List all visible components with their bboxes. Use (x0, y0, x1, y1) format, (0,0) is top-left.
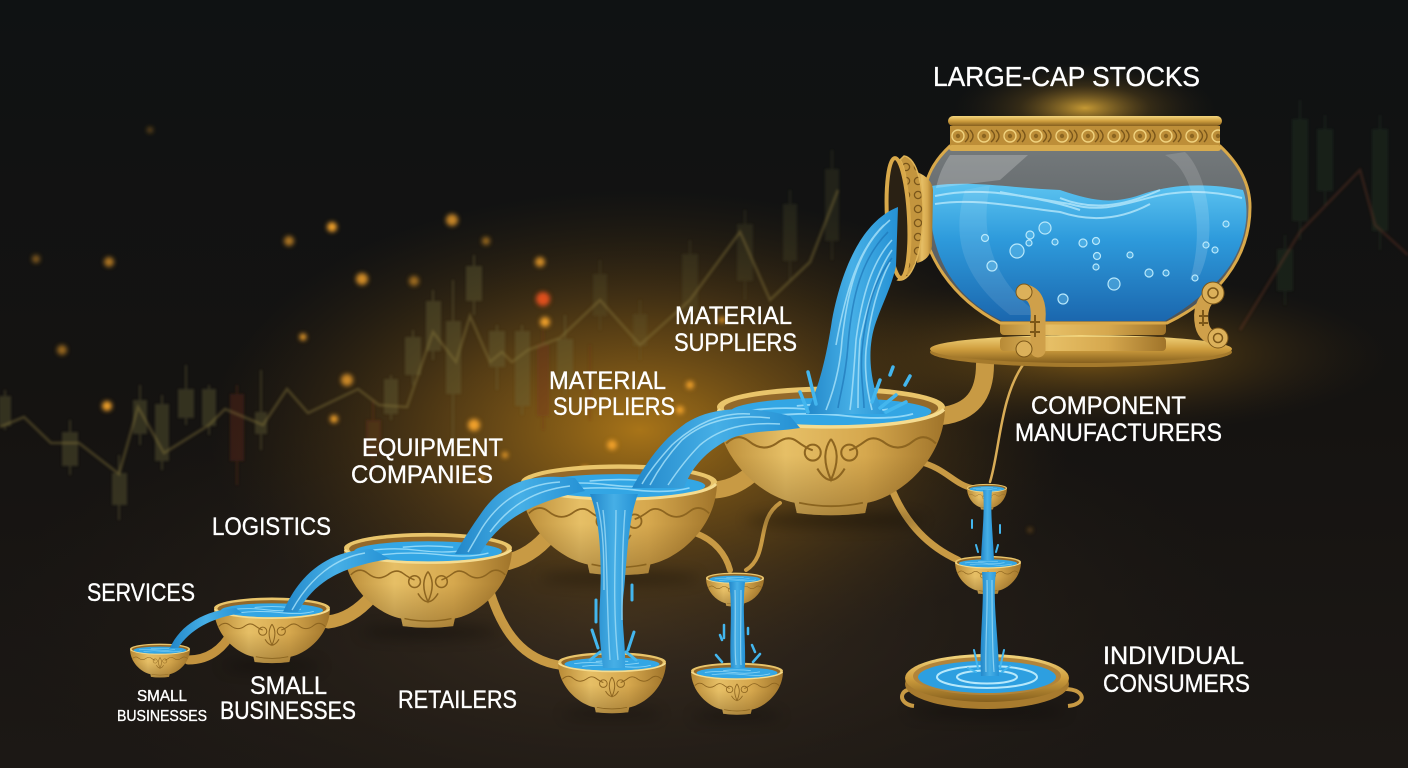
label: equipment companies: COMPANIES (351, 461, 493, 489)
waterfall: component top bowl to lower bowl (972, 490, 1000, 560)
label: material suppliers lower: MATERIAL (549, 367, 666, 395)
label: small businesses (220, 672, 356, 725)
label: material suppliers upper: MATERIAL (675, 302, 792, 330)
bowl: retailers receiving (558, 652, 666, 713)
label: material suppliers upper: SUPPLIERS (674, 329, 797, 357)
pot base rings (930, 322, 1232, 367)
label: retailers: RETAILERS (398, 686, 517, 714)
connecting golden pipes (188, 362, 1025, 666)
label: small businesses tiny (117, 688, 207, 725)
pot waves (935, 190, 1242, 218)
label: small businesses tiny: SMALL (137, 688, 187, 705)
pot water (930, 184, 1246, 321)
bowl: mid tier lower (691, 663, 783, 715)
water stream: top bowl to equipment bowl (632, 409, 800, 488)
candlestick chart backdrop (0, 100, 1408, 520)
label: individual consumers: INDIVIDUAL (1103, 642, 1244, 670)
label: logistics: LOGISTICS (212, 513, 331, 541)
water stream: pot to top bowl (800, 207, 910, 414)
waterfall: small bowl to lower bowl (716, 582, 760, 668)
spout (884, 156, 933, 280)
label: small businesses tiny: BUSINESSES (117, 708, 207, 725)
glass highlights (936, 152, 1209, 315)
label: services: SERVICES (87, 579, 195, 607)
label: material suppliers lower: SUPPLIERS (553, 393, 675, 421)
water stream: services bowl to small bowl (170, 608, 242, 648)
bowl: small businesses tiny (130, 644, 190, 678)
bowl: material suppliers (717, 386, 945, 515)
label: equipment companies: EQUIPMENT (362, 434, 503, 462)
water stream: logistics bowl to services bowl (283, 549, 390, 612)
bowl: equipment companies (521, 464, 717, 575)
bowl: logistics (344, 533, 512, 628)
bowl: component top (967, 484, 1007, 510)
waterfall: equipment bowl to retailers bowl (590, 494, 638, 668)
label: component manufacturers: MANUFACTURERS (1015, 419, 1222, 447)
pot glass body (922, 146, 1250, 323)
label: material suppliers upper (674, 302, 797, 357)
bowl: mid tier small (706, 573, 764, 606)
plate: individual consumers (902, 654, 1082, 709)
label: small businesses: SMALL (250, 672, 327, 700)
label: equipment companies (351, 434, 503, 489)
golden pot: large-cap stocks (884, 116, 1250, 367)
shadows under bowls (222, 513, 1067, 720)
bowl: component lower (955, 556, 1021, 594)
label: small businesses: BUSINESSES (220, 697, 356, 725)
title: large-cap stocks: LARGE-CAP STOCKS (933, 61, 1200, 92)
bowl: services (214, 598, 330, 663)
bubbles (982, 221, 1229, 304)
label: material suppliers lower (549, 367, 675, 421)
label: component manufacturers: COMPONENT (1031, 392, 1186, 420)
water stream: equipment bowl to logistics bowl (455, 477, 585, 554)
label: individual consumers: CONSUMERS (1103, 670, 1250, 698)
label: individual consumers (1103, 642, 1250, 698)
waterfall: component lower bowl to plate (968, 572, 1010, 676)
pot rim (948, 116, 1222, 151)
sparkles (32, 127, 1032, 532)
pot feet (1016, 282, 1228, 357)
label: component manufacturers (1015, 392, 1222, 447)
